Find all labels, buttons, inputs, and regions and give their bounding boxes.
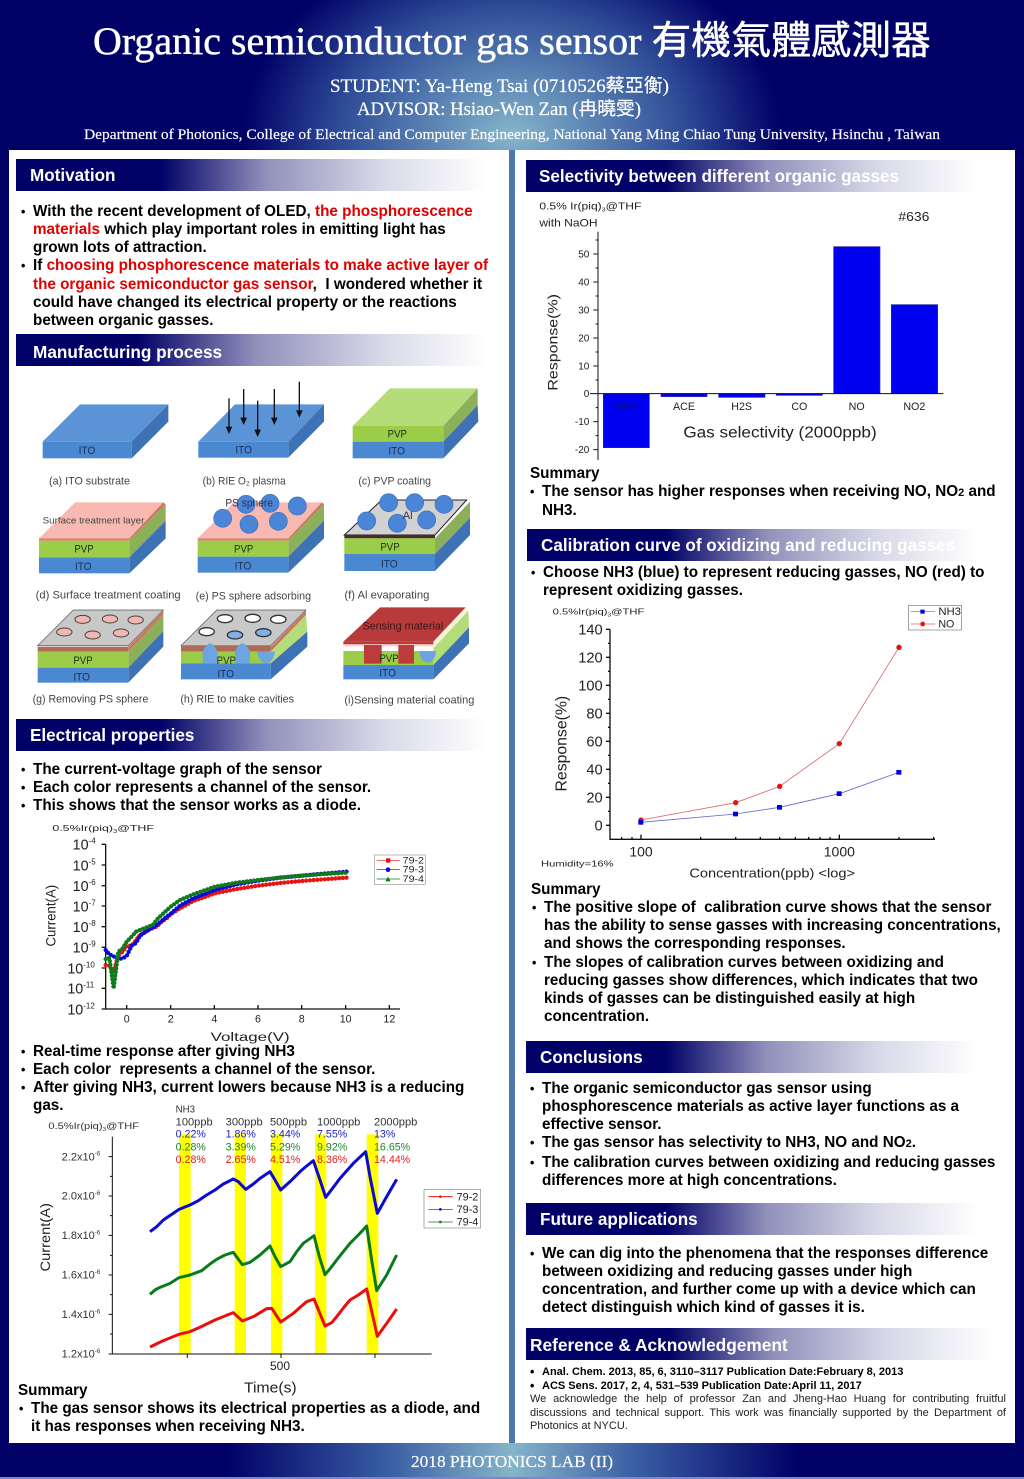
chart: current-voltage: -6 <box>89 878 96 887</box>
chart: current-voltage: 12 <box>383 1014 395 1026</box>
chart: calibration curve: 60 <box>586 734 603 750</box>
legend: NH3 <box>938 606 961 618</box>
chart: current-voltage: Voltage(V) <box>211 1030 290 1044</box>
step a <box>43 404 168 487</box>
bars <box>603 247 938 448</box>
text: conclusions: differences more at high concentrations. <box>542 1172 837 1189</box>
text: motivation: grown lots of attraction. <box>33 239 207 256</box>
text: references: Anal. Chem. 2013, 85, 6, 3110–3117 Publication Date:February 8, 2013 <box>542 1366 903 1378</box>
step i: (i)Sensing material coating <box>344 694 474 706</box>
chart: calibration curve: Response(%) <box>554 696 571 792</box>
chart: calibration curve: 1000 <box>824 844 855 860</box>
student: STUDENT: Ya-Heng Tsai (0710526蔡亞衡) <box>330 76 669 97</box>
step h: (h) RIE to make cavities <box>180 693 294 705</box>
concentration labels: 4.51% <box>270 1154 301 1166</box>
concentration labels: 16.65% <box>374 1141 411 1153</box>
chart: current-voltage: Current(A) <box>42 885 58 946</box>
chart: real-time response: 1.4x10 <box>62 1309 95 1321</box>
chart: real-time response: 3 <box>103 1127 106 1133</box>
chart: gas selectivity bars: 10 <box>578 361 590 372</box>
title: Organic semiconductor gas sensor 有機氣體感測器 <box>93 20 931 63</box>
text: selectivity summary: The sensor has higher responses when receiving NO, NO2 and <box>542 483 996 500</box>
step g: (g) Removing PS sphere <box>33 694 148 706</box>
chart: real-time response: 1.6x10 <box>62 1270 95 1282</box>
concentration labels <box>176 1105 417 1166</box>
concentration labels: 3.39% <box>226 1141 256 1153</box>
legend <box>424 1189 481 1229</box>
step f: PVP <box>380 541 400 553</box>
heading: Motivation: Motivation <box>30 166 115 185</box>
step d: (d) Surface treatment coating <box>36 590 181 602</box>
chart: calibration curve: 140 <box>578 622 603 638</box>
chart: gas selectivity bars: 3 <box>602 207 606 213</box>
chart: current-voltage: -4 <box>89 837 96 846</box>
text: motivation: If choosing phosphorescence materials to make active layer of <box>33 257 488 274</box>
concentration labels: 5.29% <box>270 1141 301 1153</box>
legend: 79-2 <box>457 1191 478 1203</box>
chart: real-time response: 1.8x10 <box>62 1230 95 1242</box>
chart: current-voltage: 10 <box>73 858 89 874</box>
chart: gas selectivity bars: NO <box>849 401 865 413</box>
chart: gas selectivity bars: NO2 <box>903 401 925 413</box>
step f: ITO <box>381 559 398 571</box>
chart: real-time response: -6 <box>95 1190 101 1197</box>
step d: Surface treatment layer <box>43 516 144 526</box>
text: left summary: The gas sensor shows its electrical properties as a diode, and <box>31 1400 480 1417</box>
chart: current-voltage: 10 <box>340 1014 352 1026</box>
step e <box>196 494 324 602</box>
text: real-time response: gas. <box>33 1097 64 1114</box>
series: NO red <box>638 645 902 823</box>
chart: current-voltage: 4 <box>211 1014 217 1026</box>
text: electrical intro: Each color represents a channel of the sensor. <box>33 779 371 796</box>
text: calibration summary: concentration. <box>544 1008 649 1025</box>
chart: gas selectivity bars: 50 <box>578 249 590 260</box>
chart: calibration curve: 0 <box>595 818 603 834</box>
chart: gas selectivity bars: -10 <box>575 417 590 428</box>
chart: real-time response: 2.2x10 <box>62 1151 95 1163</box>
diagram: manufacturing process steps <box>33 382 478 706</box>
chart: calibration curve: 80 <box>586 706 603 722</box>
chart: calibration curve: 100 <box>629 844 653 860</box>
step h: ITO <box>217 668 234 680</box>
text: electrical intro: The current-voltage graph of the sensor <box>33 761 322 778</box>
chart: real-time response: @THF <box>106 1121 140 1131</box>
legend <box>374 855 425 884</box>
chart: gas selectivity bars: 0.5% Ir(piq) <box>539 201 589 212</box>
panel: left column <box>9 150 509 1443</box>
chart: calibration curve: 120 <box>578 650 603 666</box>
chart: gas selectivity bars: NH3 <box>616 401 637 413</box>
chart: real-time response: -6 <box>95 1151 101 1158</box>
text: left summary: it has responses when receiving NH3. <box>31 1418 305 1435</box>
step c <box>353 388 478 487</box>
chart: current-voltage: 10 <box>67 961 83 977</box>
text: real-time response: After giving NH3, current lowers because NH3 is a reducing <box>33 1079 464 1096</box>
text: motivation: With the recent development of OLED, the phosphorescence <box>33 203 473 220</box>
legend: 79-3 <box>457 1204 478 1216</box>
chart: gas selectivity bars: CO <box>791 401 807 413</box>
panel: right column <box>515 150 1015 1443</box>
text: future applications: We can dig into the phenomena that the responses difference <box>542 1245 988 1262</box>
heading: Conclusions <box>526 1041 988 1073</box>
series: 79-3 blue <box>106 872 347 959</box>
text: calibration summary: The slopes of calibration curves between oxidizing and <box>544 954 944 971</box>
concentration labels: 3.44% <box>270 1129 301 1141</box>
concentration labels: 1000ppb <box>317 1116 360 1128</box>
chart: calibration curve: 20 <box>586 790 603 806</box>
legend: 79-2 <box>403 855 424 865</box>
concentration labels: 500ppb <box>270 1116 307 1128</box>
series: 79-4 green <box>106 873 347 988</box>
chart: real-time response: 500 <box>270 1359 290 1373</box>
step d <box>36 502 181 602</box>
text: conclusions: effective sensor. <box>542 1116 662 1133</box>
chart: current-voltage: -7 <box>89 898 96 907</box>
chart: gas selectivity bars: 40 <box>578 277 590 288</box>
chart: current-voltage: @THF <box>117 823 154 833</box>
chart: gas selectivity bars: ACE <box>673 401 695 413</box>
step c: (c) PVP coating <box>358 475 431 487</box>
chart: gas selectivity bars: 20 <box>578 333 590 344</box>
step d: ITO <box>75 561 92 573</box>
step b: ITO <box>235 444 252 456</box>
step a: ITO <box>79 445 95 457</box>
chart: current-voltage: -10 <box>83 960 95 969</box>
chart: gas selectivity bars: with NaOH <box>538 218 598 230</box>
step a: (a) ITO substrate <box>49 475 130 487</box>
header banner <box>0 0 1024 150</box>
heading: Manufacturing process: Manufacturing process <box>33 342 222 362</box>
concentration labels: 0.22% <box>176 1129 206 1141</box>
footer <box>0 1443 1024 1479</box>
text: left summary: Summary <box>18 1382 88 1399</box>
text: future applications: between oxidizing and reducing gasses under high <box>542 1263 912 1280</box>
chart: calibration curve: 0.5%Ir(piq) <box>553 606 593 616</box>
series: 79-3 blue <box>150 1152 397 1232</box>
chart: current-voltage: -12 <box>83 1001 95 1010</box>
text: calibration summary: and shows the corresponding responses. <box>544 935 846 952</box>
chart: real-time response <box>37 1105 481 1397</box>
chart: current-voltage: -9 <box>89 940 96 949</box>
concentration labels: NH3 <box>176 1105 195 1116</box>
legend: 79-3 <box>403 865 424 875</box>
concentration labels: 2000ppb <box>374 1116 417 1128</box>
text: future applications: detect distinguish which kind of gasses it is. <box>542 1299 865 1316</box>
chart: current-voltage: 10 <box>73 941 89 957</box>
heading: Selectivity: Selectivity between different organic gasses <box>539 167 899 186</box>
text: acknowledgement: We acknowledge the help of professor Zan and Jheng-Hao Huang for contributing fruitful discussions and technical support. This work was financially supported by the Department of Photonics at NYCU. <box>530 1393 1006 1432</box>
chart: current-voltage: 10 <box>73 879 89 895</box>
text: conclusions: phosphorescence materials as active layer functions as a <box>542 1098 959 1115</box>
series: NH3 blue <box>638 770 901 825</box>
text: left summary <box>18 1382 480 1435</box>
text: conclusions: The gas sensor has selectivity to NH3, NO and NO2. <box>542 1134 916 1151</box>
chart: gas selectivity bars: Gas selectivity (2000ppb) <box>683 424 877 441</box>
concentration labels: 8.36% <box>317 1154 348 1166</box>
step f: Al <box>403 510 413 522</box>
yellow gas bands <box>179 1134 378 1354</box>
heading: Motivation <box>16 159 496 191</box>
text: future applications <box>530 1245 988 1316</box>
text: motivation: materials which play important roles in emitting light has <box>33 221 446 238</box>
concentration labels: 300ppb <box>226 1116 263 1128</box>
text: real-time response: Real-time response after giving NH3 <box>33 1043 295 1060</box>
chart: current-voltage: 10 <box>73 899 89 915</box>
concentration labels: 100ppb <box>176 1116 213 1128</box>
text: calibration summary: The positive slope of calibration curve shows that the sensor <box>544 899 991 916</box>
heading: Manufacturing process <box>16 334 496 366</box>
text: real-time response: Each color represents a channel of the sensor. <box>33 1061 375 1078</box>
chart: current-voltage: 8 <box>299 1014 305 1026</box>
chart: gas selectivity bars: #636 <box>898 210 929 224</box>
text: calibration summary: reducing gasses show differences, which indicates that two <box>544 972 978 989</box>
chart: real-time response: 2.0x10 <box>62 1191 95 1203</box>
concentration labels: 13% <box>374 1129 396 1141</box>
chart: calibration curve <box>541 605 962 880</box>
concentration labels: 0.28% <box>176 1154 206 1166</box>
step i: Sensing material <box>362 620 443 632</box>
step c: ITO <box>388 445 405 457</box>
chart: gas selectivity bars <box>538 201 944 460</box>
chart: current-voltage: 10 <box>67 982 83 998</box>
text: selectivity summary <box>530 465 996 519</box>
chart: current-voltage: 6 <box>255 1014 261 1026</box>
text: future applications: concentration, and further come up with a device which can <box>542 1281 976 1298</box>
text: motivation: between organic gasses. <box>33 312 214 329</box>
text: motivation: could have changed its electrical property or the reactions <box>33 294 457 311</box>
chart: current-voltage: 10 <box>73 920 89 936</box>
text: conclusions <box>530 1080 995 1189</box>
heading: Electrical properties <box>16 719 496 751</box>
heading: Reference & Acknowledgement <box>526 1328 1002 1360</box>
chart: gas selectivity bars: 30 <box>578 305 590 316</box>
legend: 79-4 <box>457 1217 478 1229</box>
chart: real-time response: Time(s) <box>244 1381 297 1397</box>
text: calibration summary: kinds of gasses can be distinguished easily at high <box>544 990 915 1007</box>
concentration labels: 1.86% <box>226 1129 256 1141</box>
chart: current-voltage: -5 <box>89 857 96 866</box>
text: conclusions: The calibration curves between oxidizing and reducing gasses <box>542 1154 995 1171</box>
step f: (f) Al evaporating <box>344 590 429 602</box>
department: Department of Photonics, College of Electrical and Computer Engineering, National Yang Ming Chiao Tung University, Hsinchu , Taiwan <box>84 127 941 143</box>
text: calibration summary <box>531 881 1001 1025</box>
concentration labels: 2.65% <box>226 1154 256 1166</box>
chart: real-time response: -6 <box>95 1229 101 1236</box>
step c: PVP <box>388 428 407 440</box>
heading: Electrical properties: Electrical properties <box>30 726 194 745</box>
concentration labels: 7.55% <box>317 1129 348 1141</box>
chart: real-time response: -6 <box>95 1348 101 1355</box>
chart: current-voltage: 3 <box>113 829 117 835</box>
text: motivation: the organic semiconductor gas sensor, I wondered whether it <box>33 276 482 293</box>
chart: current-voltage: -11 <box>83 981 95 990</box>
chart: gas selectivity bars: -20 <box>575 445 590 456</box>
step d: PVP <box>74 544 94 556</box>
step i <box>343 607 474 706</box>
chart: calibration curve: 100 <box>578 678 603 694</box>
chart: real-time response: 1.2x10 <box>62 1349 95 1361</box>
chart: calibration curve: Humidity=16% <box>541 859 614 869</box>
text: calibration summary: has the ability to sense gasses with increasing concentrations, <box>544 917 1001 934</box>
series: 79-4 green <box>150 1226 397 1294</box>
chart: current-voltage: 2 <box>168 1014 174 1026</box>
chart: current-voltage: 10 <box>67 1002 83 1018</box>
heading: Future applications: Future applications <box>540 1210 698 1229</box>
step b <box>198 382 324 487</box>
heading: Selectivity <box>526 160 988 192</box>
step e: (e) PS sphere adsorbing <box>196 590 311 602</box>
chart: real-time response: -6 <box>95 1269 101 1276</box>
chart: real-time response: Current(A) <box>37 1203 53 1272</box>
step e: PVP <box>234 543 253 555</box>
footer label: 2018 PHOTONICS LAB (II) <box>411 1452 613 1471</box>
chart: calibration curve: Concentration(ppb) <log> <box>689 866 855 880</box>
chart: current-voltage: 0 <box>124 1014 130 1026</box>
chart: gas selectivity bars: 0 <box>584 389 590 400</box>
chart: gas selectivity bars: @THF <box>606 201 641 212</box>
legend <box>908 605 962 631</box>
chart: current-voltage: 10 <box>73 838 89 854</box>
text: real-time response <box>21 1043 464 1114</box>
chart: real-time response: 0.5%Ir(piq) <box>48 1121 92 1131</box>
text: electrical intro <box>21 761 371 814</box>
step g: PVP <box>73 655 93 667</box>
chart: current-voltage <box>42 823 426 1044</box>
advisor: ADVISOR: Hsiao-Wen Zan (冉曉雯) <box>357 99 641 120</box>
series: 79-2 red <box>150 1289 397 1347</box>
text: calibration intro: Choose NH3 (blue) to represent reducing gasses, NO (red) to <box>543 564 984 581</box>
legend: 79-4 <box>403 874 424 884</box>
series: 79-2 red <box>106 878 347 972</box>
chart: current-voltage: 0.5%Ir(piq) <box>52 823 95 833</box>
chart: real-time response: -6 <box>95 1308 101 1315</box>
heading: Calibration: Calibration curve of oxidizing and reducing gasses <box>541 536 955 555</box>
concentration labels: 9.92% <box>317 1141 348 1153</box>
concentration labels: 14.44% <box>374 1154 411 1166</box>
step f <box>344 494 470 602</box>
chart: gas selectivity bars: H2S <box>731 401 752 413</box>
text: references: ACS Sens. 2017, 2, 4, 531–539 Publication Date:April 11, 2017 <box>542 1380 862 1392</box>
step h: PVP <box>217 655 236 667</box>
step i: ITO <box>379 668 396 680</box>
step e: ITO <box>235 561 251 573</box>
concentration labels: 0.28% <box>176 1141 206 1153</box>
heading: Future applications <box>526 1203 988 1235</box>
chart: calibration curve: 40 <box>586 762 603 778</box>
heading: Reference & Acknowledgement: Reference & Acknowledgement <box>530 1335 788 1355</box>
step h <box>180 610 307 705</box>
heading: Conclusions: Conclusions <box>540 1048 643 1067</box>
chart: calibration curve: @THF <box>611 606 644 616</box>
step e: PS sphere <box>225 498 273 510</box>
text: electrical intro: This shows that the sensor works as a diode. <box>33 797 361 814</box>
step g: ITO <box>73 672 90 684</box>
text: selectivity summary: NH3. <box>542 502 577 519</box>
chart: current-voltage: -8 <box>89 919 96 928</box>
legend: NO <box>938 619 954 631</box>
text: selectivity summary: Summary <box>530 465 600 482</box>
text: calibration intro: represent oxidizing gasses. <box>543 582 743 599</box>
chart: gas selectivity bars: Response(%) <box>545 294 561 391</box>
text: motivation <box>21 203 488 329</box>
step g <box>33 610 163 706</box>
step i: PVP <box>379 653 399 665</box>
text: references <box>530 1366 903 1392</box>
text: calibration summary: Summary <box>531 881 601 898</box>
chart: calibration curve: 3 <box>607 612 611 618</box>
heading: Calibration <box>527 529 988 561</box>
text: calibration intro <box>531 564 984 599</box>
step b: (b) RIE O₂ plasma <box>203 475 286 487</box>
text: conclusions: The organic semiconductor gas sensor using <box>542 1080 872 1097</box>
